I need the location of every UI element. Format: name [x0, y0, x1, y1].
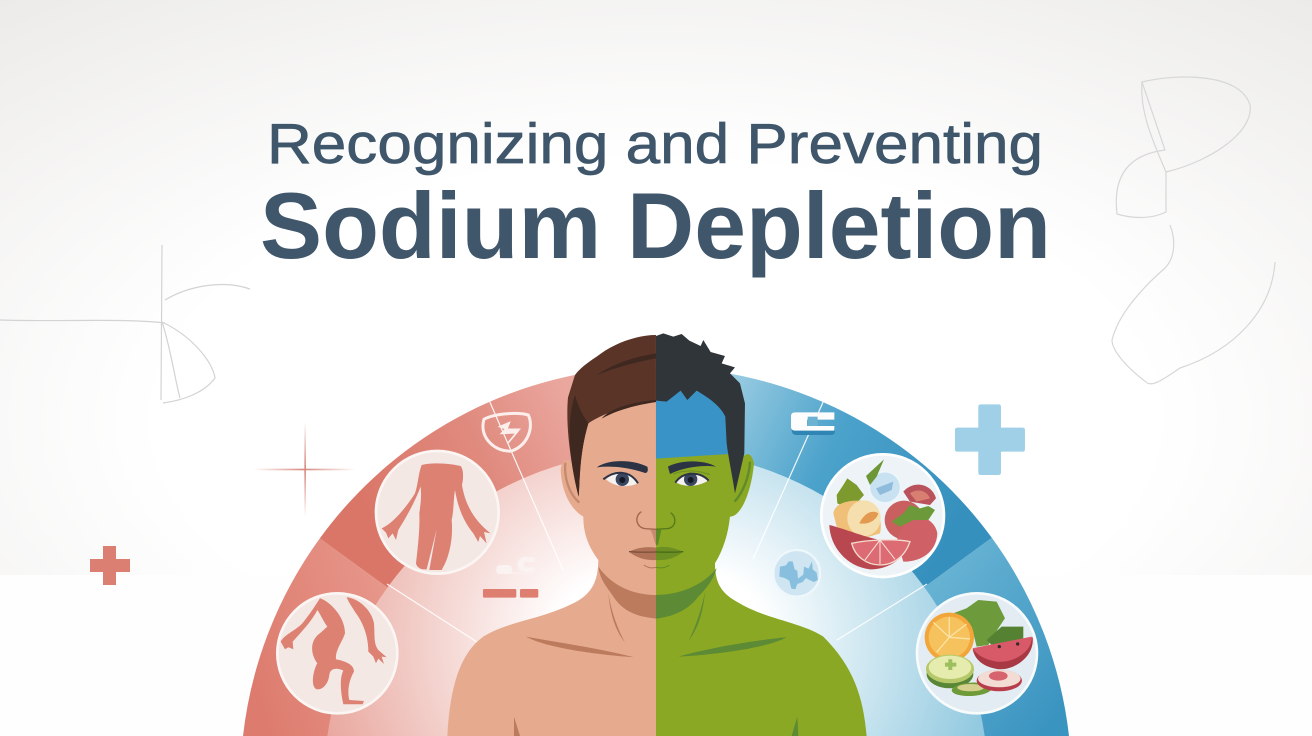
right dark hair [656, 333, 745, 493]
icon: red bars [483, 589, 538, 598]
icon: cramping body circle [277, 593, 397, 713]
left red semicircle panel [243, 367, 656, 736]
person split portrait [447, 333, 867, 736]
left side icons [277, 413, 538, 713]
icon: shield symptom badge [483, 413, 530, 451]
left skin half: torso and head [447, 400, 656, 736]
title [260, 112, 1051, 278]
inner left zone [327, 451, 656, 736]
plate: upper food circle [821, 454, 944, 577]
divider lines [753, 400, 927, 640]
ring upper right segment [656, 367, 992, 736]
icon: small water droplet circle [773, 550, 820, 597]
left ear [565, 463, 579, 503]
inner right zone [656, 451, 985, 736]
ring lower right segment [790, 538, 1069, 736]
divider lines [387, 400, 563, 642]
crosshair sparkle [253, 422, 355, 517]
clavicle shading [514, 592, 798, 736]
icon: body silhouette circle [376, 451, 499, 574]
plus icon blue [955, 404, 1025, 475]
blue forehead panel [656, 383, 729, 459]
neck shadow left [598, 567, 656, 619]
left eyebrow [597, 461, 648, 473]
ring lower left segment [243, 538, 520, 736]
title line 1: Recognizing and Preventing [267, 112, 1043, 176]
nose [637, 512, 675, 545]
ring upper left segment [320, 367, 656, 736]
right blue semicircle panel [656, 367, 1069, 736]
icon: white cup [496, 557, 535, 574]
decorative sketch lines left [0, 245, 250, 403]
right side icons [773, 412, 1037, 713]
plate: lower food circle [917, 593, 1037, 713]
plus icon red [90, 546, 130, 585]
title line 2: Sodium Depletion [260, 173, 1051, 278]
neck shadow right [656, 568, 717, 619]
icon: pill capsule [791, 412, 835, 435]
right ear [735, 462, 750, 502]
mouth [629, 547, 683, 568]
left eye [603, 473, 638, 486]
left brown hair [567, 335, 656, 497]
right green half: torso and head [656, 453, 867, 736]
right eyebrow [668, 461, 716, 474]
decorative sketch lines right [1112, 77, 1275, 384]
right eye [673, 471, 710, 486]
